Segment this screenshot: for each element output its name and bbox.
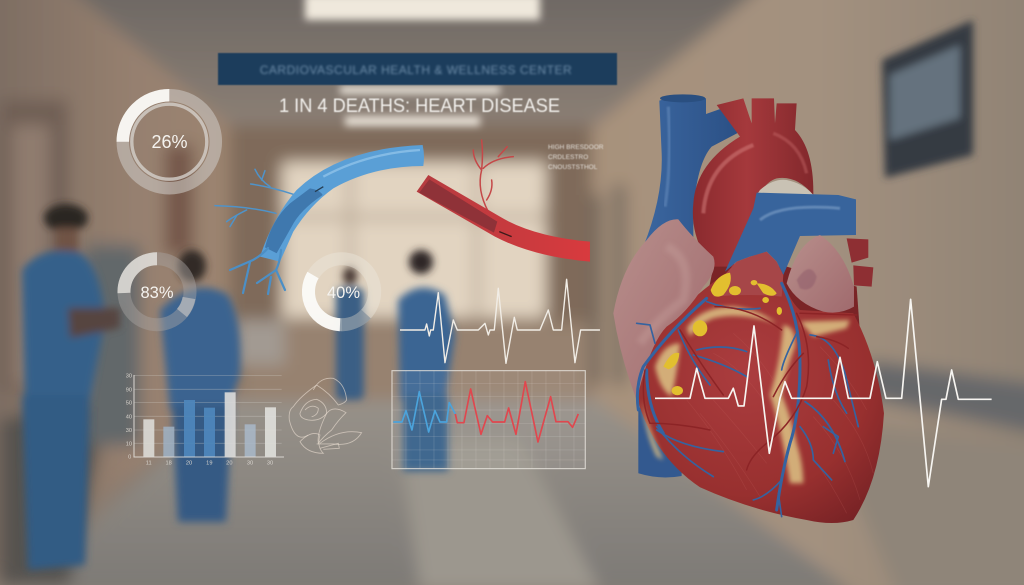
bright arc bbox=[308, 275, 340, 325]
ceiling bbox=[0, 0, 1024, 140]
panel grid bbox=[392, 371, 585, 469]
y labels: 0 bbox=[128, 455, 131, 461]
icon: line-art heart sketch bbox=[289, 378, 362, 453]
right segment bbox=[182, 298, 189, 313]
light lower bbox=[345, 116, 480, 126]
y labels bbox=[126, 373, 132, 461]
donut 26% bbox=[123, 95, 216, 188]
x labels: 19 bbox=[206, 460, 212, 466]
far nurse bbox=[336, 267, 364, 400]
bar 3 bbox=[184, 400, 195, 457]
door left bbox=[0, 100, 68, 390]
dark left foot of wall bbox=[0, 395, 110, 585]
branch B3 bbox=[268, 277, 271, 294]
nurse back view bbox=[160, 250, 240, 522]
torso bbox=[398, 288, 455, 400]
right wall bbox=[590, 0, 1024, 585]
x labels: 20 bbox=[226, 460, 232, 466]
tube outer bbox=[260, 145, 424, 262]
frame bbox=[882, 20, 973, 178]
panel border bbox=[392, 371, 585, 469]
value: 83% bbox=[140, 284, 174, 302]
hair bbox=[409, 250, 433, 274]
head bbox=[343, 267, 357, 285]
staff figures bbox=[22, 204, 455, 570]
large heart ECG trace bbox=[655, 299, 992, 487]
legs bbox=[403, 395, 448, 471]
bar 2 bbox=[163, 427, 174, 457]
right doors 2 bbox=[612, 185, 626, 385]
SVC highlight bbox=[665, 107, 669, 207]
branch A2 bbox=[243, 262, 250, 293]
branch B bbox=[257, 250, 281, 283]
window mullions bbox=[282, 162, 546, 318]
ventricles bbox=[635, 272, 884, 523]
conus muscle bbox=[713, 252, 783, 297]
hanging sign bbox=[218, 53, 617, 85]
y labels: 40 bbox=[126, 414, 132, 420]
branch A bbox=[230, 248, 268, 270]
y labels: 30 bbox=[126, 428, 132, 434]
atrium shading bbox=[640, 247, 686, 343]
blue artery cross-section bbox=[215, 145, 424, 262]
arch opening bbox=[757, 180, 813, 195]
ceiling light fixtures bbox=[305, 0, 540, 126]
donut 83% bbox=[124, 259, 190, 325]
face/neck bbox=[56, 228, 78, 254]
inner ring bbox=[132, 104, 207, 179]
light top bbox=[305, 0, 540, 20]
cart equipment bbox=[85, 245, 140, 445]
y labels: 90 bbox=[126, 387, 132, 393]
panel background bbox=[392, 371, 585, 469]
risk factor labels bbox=[548, 144, 604, 171]
bar 5 bbox=[225, 392, 236, 457]
wainscot below window bbox=[240, 322, 590, 400]
value: 40% bbox=[327, 284, 360, 302]
sign board bbox=[218, 53, 617, 85]
legs bbox=[172, 405, 232, 522]
superior vena cava bbox=[643, 96, 743, 250]
body bbox=[336, 288, 364, 400]
floor right edge shade bbox=[820, 420, 1024, 585]
pulmonary veins lower bbox=[853, 265, 873, 287]
aorta arch bbox=[693, 98, 813, 273]
label line 1: HIGH BRESDOOR bbox=[548, 144, 604, 151]
left atrium pink bbox=[613, 219, 715, 400]
blue trace bbox=[393, 392, 455, 432]
x labels: 30 bbox=[267, 460, 273, 466]
ECG monitor panel bbox=[392, 371, 585, 469]
wall rail bbox=[868, 360, 1024, 435]
hair bbox=[178, 250, 206, 282]
coronary vessels red bbox=[643, 307, 857, 470]
right atrium pink bbox=[787, 235, 854, 313]
corridor floor bbox=[20, 395, 850, 585]
left column bbox=[165, 145, 193, 255]
small ECG line bbox=[400, 279, 600, 363]
red trace bbox=[455, 382, 578, 442]
x labels: 11 bbox=[146, 460, 152, 466]
fat patches bbox=[642, 307, 850, 483]
branches bbox=[473, 140, 513, 212]
outer ring grey bbox=[123, 95, 216, 188]
bar 7 bbox=[265, 407, 276, 457]
aorta highlight bbox=[703, 145, 753, 213]
ventricle striations bbox=[687, 333, 873, 513]
cart 2 bbox=[235, 320, 285, 365]
vena cava opening bbox=[660, 94, 705, 102]
lower floor highlight bbox=[400, 440, 600, 585]
label line 3: CNOUSTSTHOL bbox=[548, 164, 598, 171]
pulmonary veins bbox=[847, 238, 868, 263]
bar 1 bbox=[143, 419, 154, 457]
tube highlight bbox=[323, 150, 420, 177]
branch B2 bbox=[276, 270, 285, 290]
arm bbox=[68, 308, 120, 338]
ring base bbox=[309, 259, 375, 325]
grid lines bbox=[134, 376, 282, 443]
tube open lumen bbox=[265, 188, 323, 253]
coronary vessels blue main bbox=[637, 283, 800, 510]
y labels: 50 bbox=[126, 401, 132, 407]
value: 26% bbox=[151, 132, 188, 152]
pulmonary highlight bbox=[760, 207, 840, 220]
branches upper bbox=[215, 169, 293, 227]
sign text: CARDIOVASCULAR HEALTH & WELLNESS CENTER bbox=[260, 63, 572, 77]
x labels: 18 bbox=[166, 460, 172, 466]
yellow fat deposits bbox=[663, 273, 782, 395]
wall sign on right bbox=[882, 20, 973, 178]
y labels: 10 bbox=[126, 441, 132, 447]
x labels: 30 bbox=[247, 460, 253, 466]
poster bbox=[890, 45, 960, 140]
heart base fill bbox=[700, 267, 860, 333]
torso bbox=[22, 250, 105, 400]
back wall bbox=[230, 125, 592, 405]
coronary vessels blue branches bbox=[637, 302, 858, 517]
torso bbox=[160, 288, 240, 410]
nurse left bbox=[22, 204, 120, 570]
inferior vena cava bbox=[638, 407, 682, 477]
title: 1 IN 4 DEATHS: HEART DISEASE bbox=[279, 95, 560, 117]
window bbox=[282, 162, 546, 318]
x labels: 20 bbox=[186, 460, 192, 466]
outer ring highlight bbox=[123, 95, 169, 142]
red artery cross-section bbox=[417, 140, 590, 262]
donut 40% bbox=[308, 259, 375, 325]
legs bbox=[22, 395, 90, 570]
hair bbox=[44, 204, 88, 232]
bar 4 bbox=[204, 408, 215, 457]
light segment bbox=[124, 259, 157, 293]
light mid bbox=[340, 86, 500, 94]
y labels: 30 bbox=[126, 373, 132, 379]
tube bbox=[417, 175, 590, 262]
left wall bbox=[0, 0, 235, 585]
cut line bbox=[499, 232, 512, 237]
atrium shade bbox=[797, 269, 817, 289]
ring base bbox=[124, 259, 190, 325]
label line 2: CRDLESTRO bbox=[548, 154, 588, 161]
dim arc bbox=[342, 314, 366, 325]
anatomical heart bbox=[613, 94, 992, 523]
blue artery lower branches bbox=[230, 248, 285, 294]
arch sheen bbox=[773, 133, 807, 173]
bar chart bbox=[126, 373, 284, 466]
pulmonary artery bbox=[725, 193, 856, 275]
x labels bbox=[146, 460, 273, 466]
door left inner bbox=[12, 125, 50, 385]
cut line bbox=[315, 187, 323, 192]
axes bbox=[134, 375, 284, 457]
bar 6 bbox=[245, 424, 256, 457]
open lumen bbox=[419, 179, 497, 233]
centre nurse bbox=[398, 250, 455, 471]
right doors bbox=[590, 195, 602, 385]
